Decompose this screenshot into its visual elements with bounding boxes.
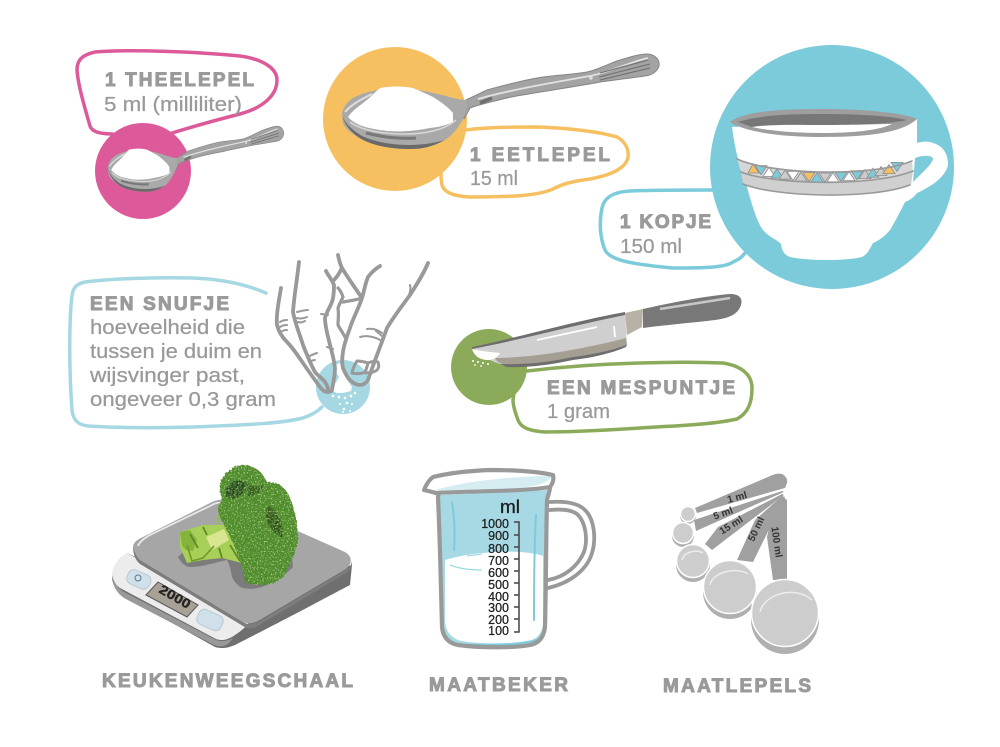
text: spoon sizes: 5 ml [712, 505, 735, 523]
heading: 1 kopje: 1 KOPJE [620, 212, 711, 233]
text: spoon sizes: 100 ml [768, 526, 784, 559]
text: scale numbers: 900 [488, 529, 509, 543]
text: spoon sizes: 1 ml [726, 490, 749, 506]
icon: scale [112, 500, 352, 648]
text: snufje description: wijsvinger past, [89, 364, 245, 387]
text: scale numbers: 300 [488, 601, 509, 615]
text: scale numbers [481, 517, 509, 638]
panel: maatbeker [424, 470, 594, 696]
panel: theelepel [77, 51, 284, 219]
icon: blue circle [710, 45, 954, 289]
text: scale numbers: 700 [488, 554, 509, 568]
text: scale numbers: 800 [488, 542, 509, 556]
icon: cup [730, 109, 948, 260]
text: snufje description [89, 316, 276, 411]
text: scale numbers: 500 [488, 578, 509, 592]
text: scale numbers: 600 [488, 566, 509, 580]
text: ml unit: ml [500, 497, 520, 517]
text: snufje description: ongeveer 0,3 gram [90, 388, 276, 411]
icon: knife [472, 294, 742, 367]
icon: light blue circle [316, 360, 370, 414]
text: snufje description: tussen je duim en [90, 340, 262, 363]
heading: 1 eetlepel: 1 EETLEPEL [470, 145, 610, 166]
callout: eetlepel outline [441, 127, 628, 197]
panel: snufje [70, 255, 428, 428]
panel: maatlepels [663, 474, 819, 697]
panel: mespuntje [451, 294, 752, 432]
icon: broccoli [180, 465, 298, 585]
text: scale numbers: 1000 [481, 517, 509, 531]
text: spoon sizes: 50 ml [747, 515, 767, 543]
icon: small spoon [108, 126, 284, 192]
text: snufje description: hoeveelheid die [90, 316, 245, 339]
label: maatlepels: MAATLEPELS [663, 676, 811, 697]
icon: pink circle [95, 123, 191, 219]
callout: snufje outline [70, 278, 322, 428]
panel: kopje [600, 45, 954, 289]
text: 150 ml: 150 ml [620, 235, 682, 258]
callout: mespuntje outline [513, 362, 752, 432]
icon: salt [332, 363, 356, 413]
text: scale numbers: 400 [488, 590, 509, 604]
text: 1 gram: 1 gram [547, 400, 610, 423]
icon: green circle [451, 329, 527, 405]
callout: kopje outline [600, 190, 745, 268]
label: keukenweegschaal: KEUKENWEEGSCHAAL [102, 671, 353, 692]
icon: orange circle [323, 47, 467, 191]
callout: theelepel outline [77, 51, 277, 134]
text: spoon sizes [712, 490, 784, 559]
icon: hand [277, 255, 428, 392]
text: 15 ml: 15 ml [470, 167, 518, 190]
panel: eetlepel [323, 47, 659, 197]
text: spoon sizes: 15 ml [718, 514, 745, 537]
text: scale display: 2000 [156, 582, 193, 612]
label: maatbeker: MAATBEKER [429, 675, 568, 696]
heading: 1 theelepel: 1 THEELEPEL [105, 70, 254, 91]
text: scale numbers: 200 [488, 613, 509, 627]
heading: een mespuntje: EEN MESPUNTJE [547, 378, 735, 399]
icon: big spoon [342, 54, 659, 149]
text: 5 ml: 5 ml (milliliter) [104, 93, 242, 116]
panel: keukenweegschaal [102, 465, 353, 692]
text: scale numbers: 100 [488, 624, 509, 638]
heading: een snufje: EEN SNUFJE [90, 294, 229, 315]
icon: measuring spoons [672, 474, 819, 654]
icon: measuring cup [424, 470, 594, 647]
